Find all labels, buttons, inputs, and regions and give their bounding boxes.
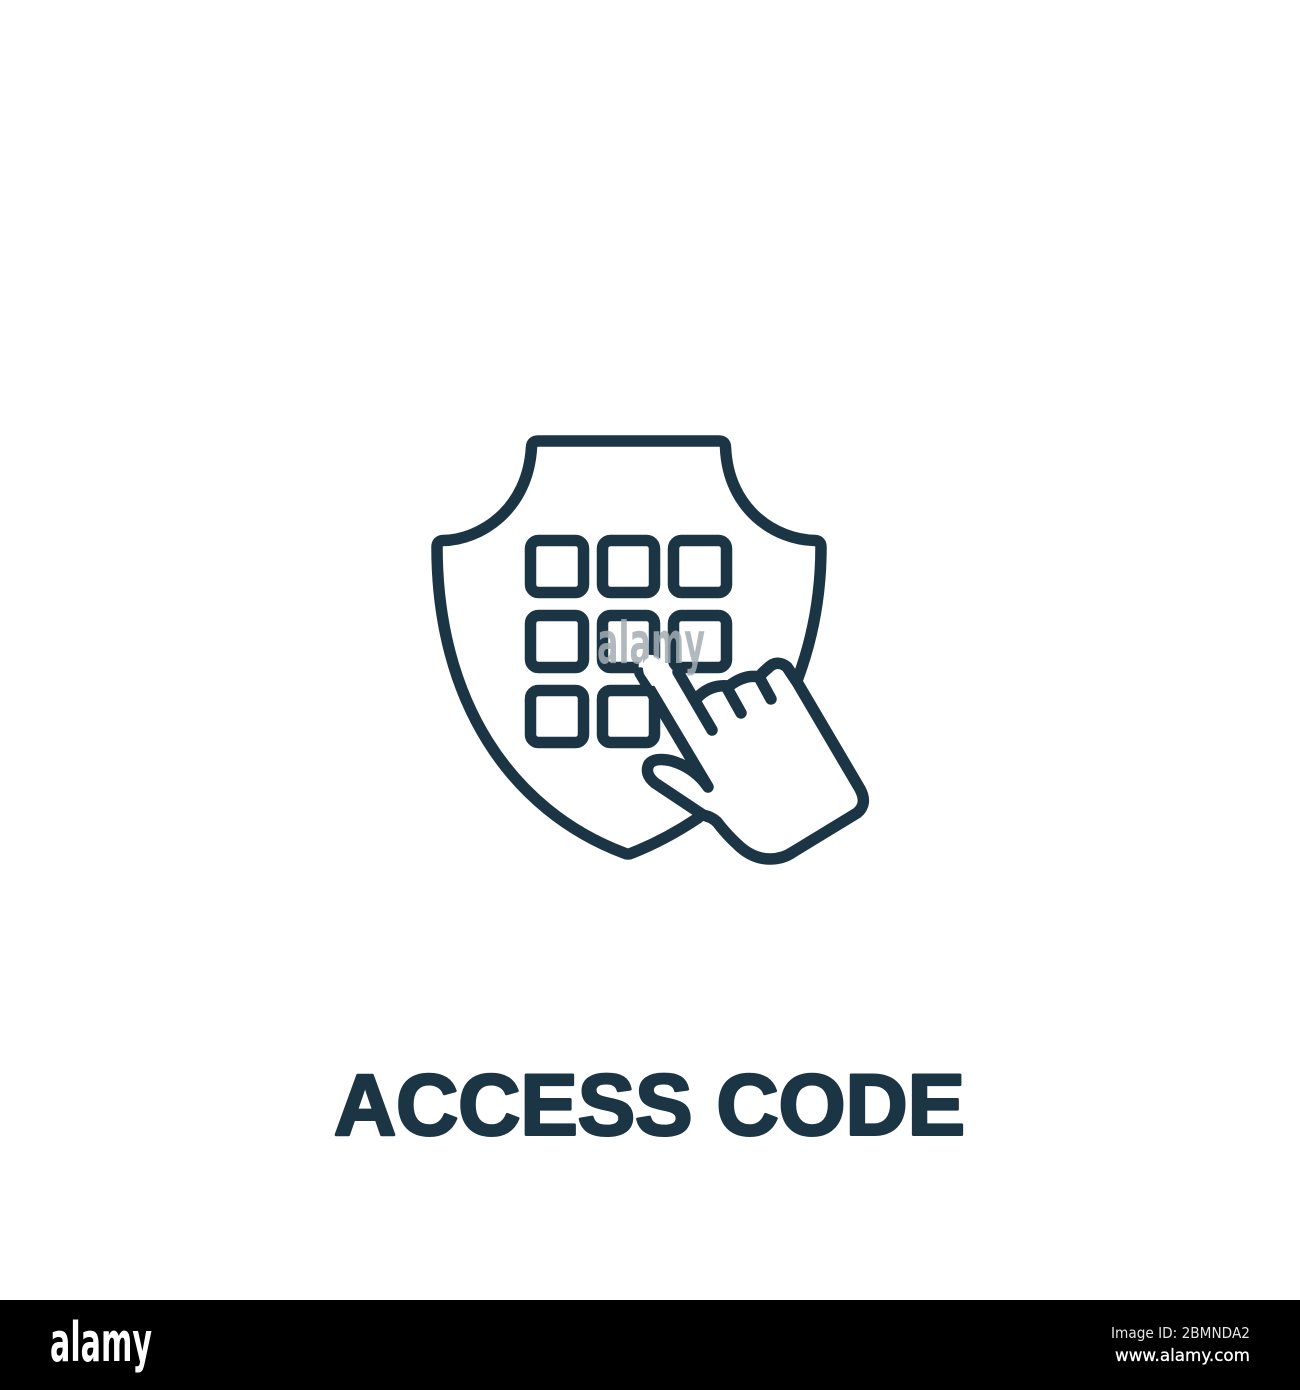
icon: shield with keypad and pointing hand	[437, 441, 863, 859]
icon: keypad of nine keys	[530, 540, 726, 742]
title: ACCESS CODE: ACCESS CODE	[334, 1058, 965, 1154]
icon: shield outline	[437, 441, 821, 854]
fingertip highlight	[643, 657, 672, 686]
icon: pointing hand	[639, 655, 863, 859]
footer image id: Image ID: 2BMNDA2	[1111, 1324, 1250, 1342]
watermark: alamy over keypad: alamy	[597, 609, 705, 677]
footer logo: alamy: alamy	[50, 1311, 152, 1374]
footer bar	[0, 1300, 1300, 1390]
footer website: www.alamy.com	[1115, 1346, 1250, 1366]
